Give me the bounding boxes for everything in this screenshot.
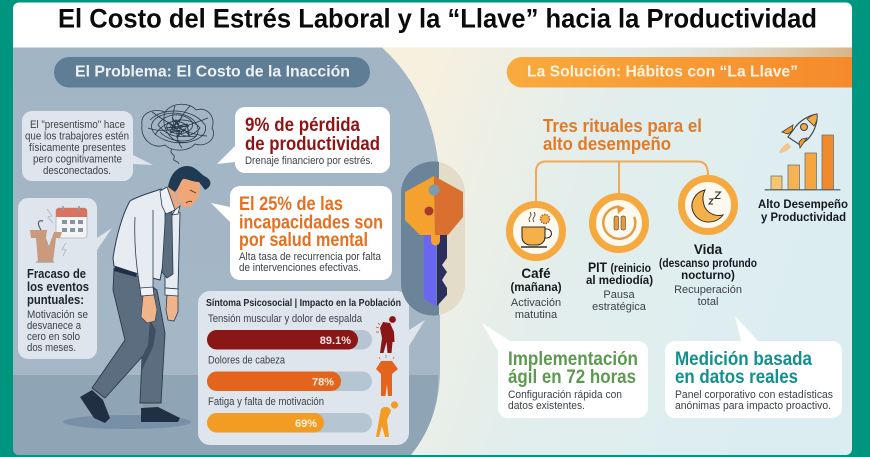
icon: tangled thought scribble (142, 104, 214, 164)
ritual: cafe: (mañana) (510, 282, 562, 294)
rituals heading: alto desempeño (543, 133, 671, 154)
key head left (405, 176, 435, 235)
ritual: vida: (descanso profundo (659, 258, 757, 270)
sleeve crease lines (135, 210, 153, 288)
bar: dolores de cabeza 78% (207, 354, 372, 391)
far hand (166, 295, 178, 321)
card: fracaso de los eventos puntuales: dos meses. (27, 342, 76, 354)
callout: 25% incapacidades: incapacidades son (239, 212, 383, 234)
icon: pause and restart (592, 196, 646, 250)
bar: tension muscular 89.1%: Tensión muscular y dolor de espalda (208, 313, 363, 325)
bar: tension muscular 89.1% (207, 313, 372, 350)
card: fracaso de los eventos puntuales: puntuales: (27, 292, 84, 307)
callout: 25% incapacidades: El 25% de las (239, 194, 343, 215)
icon: rocket (779, 114, 817, 153)
high performance chart: y Productividad (761, 210, 846, 224)
callout: 9% perdida de productividad: Drenaje financiero por estrés. (245, 155, 373, 167)
key gem (424, 206, 434, 216)
shoes (80, 390, 180, 423)
callout: 9% perdida de productividad (217, 107, 390, 173)
rituals heading: Tres rituales para el (543, 115, 702, 136)
far sleeve (165, 205, 180, 289)
ritual: cafe: Café (521, 266, 551, 281)
shadow (63, 415, 191, 429)
high performance chart: Alto Desempeño (758, 197, 848, 211)
callout: 25% incapacidades: Alta tasa de recurrencia por falta (239, 251, 382, 263)
bar: fatiga 69% (207, 396, 372, 432)
front hand (141, 295, 157, 323)
neck (163, 182, 180, 212)
ritual: vida: total (698, 296, 718, 308)
chart card: sintomas psicosociales (198, 291, 425, 445)
icon: yellow figure fatigue (376, 401, 398, 437)
tie (162, 211, 173, 278)
ritual: vida (659, 178, 757, 308)
callout: implementacion agil: Configuración rápida con (508, 389, 622, 401)
hair (168, 166, 210, 192)
card: fracaso de los eventos puntuales: desvanece a (27, 320, 82, 332)
trouser shade (141, 320, 156, 372)
icon: red figure back pain (376, 316, 396, 353)
key hole (428, 184, 440, 196)
high performance chart (758, 114, 848, 224)
card: fracaso de los eventos puntuales (18, 198, 112, 359)
bar: dolores de cabeza 78%: 78% (312, 376, 334, 388)
callout: implementacion agil: ágil en 72 horas (508, 367, 636, 388)
ritual: PIT (586, 196, 653, 313)
icon: moon and zzz (682, 178, 734, 232)
icon: key (401, 161, 465, 316)
rituals heading (543, 115, 702, 154)
callout: medicion basada en datos: Medición basada (675, 349, 812, 370)
front sleeve (133, 217, 153, 289)
heading pill: solution (507, 57, 852, 88)
panel: problem background (13, 48, 440, 456)
ritual: PIT: PIT (reinicio (588, 260, 651, 275)
callout: implementacion agil (482, 323, 648, 418)
key blade (424, 235, 436, 307)
ritual: PIT: estratégica (592, 301, 647, 313)
bar: tension muscular 89.1%: 89.1% (320, 335, 351, 347)
ritual: vida: nocturno) (681, 270, 735, 282)
cuffs (140, 287, 178, 296)
rising bars (765, 135, 840, 190)
card: fracaso de los eventos puntuales: los eventos (27, 279, 89, 294)
speech bubble: presentismo: que los trabajores estén (25, 130, 129, 142)
callout: 25% incapacidades: de intervenciones efectivas. (239, 262, 361, 274)
speech bubble: presentismo: pero cognitivamente (33, 154, 122, 166)
callout: 9% perdida de productividad: de productividad (245, 134, 380, 155)
panel: solution background (382, 48, 852, 455)
speech bubble: presentismo: desconectados. (43, 165, 111, 177)
belt (114, 266, 137, 277)
card: fracaso de los eventos puntuales: Fracaso de (27, 266, 86, 281)
key capsule background (401, 161, 439, 316)
bar: fatiga 69%: Fatiga y falta de motivación (208, 396, 324, 408)
callout: medicion basada en datos: Panel corporativo con estadísticas (675, 389, 833, 401)
collar (160, 187, 180, 215)
speech bubble: presentismo: físicamente presentes (29, 142, 126, 154)
ritual: vida: Recuperación (674, 284, 742, 296)
icon: orange figure headache (376, 355, 398, 396)
heading pill: solution: La Solución: Hábitos con “La Llave” (527, 64, 798, 80)
card: fracaso de los eventos puntuales: cero en solo (27, 331, 80, 343)
bar: dolores de cabeza 78%: Dolores de cabeza (208, 354, 286, 366)
icon: broken podium and calendar (30, 206, 87, 262)
callout: implementacion agil: Implementación (508, 349, 638, 370)
title: El Costo del Estrés Laboral y la “Llave” hacia la Productividad (58, 4, 817, 34)
man: stressed worker (63, 166, 210, 429)
speech bubble: presentismo: El "presentismo" hace (30, 119, 125, 131)
callout: 25% incapacidades (211, 186, 392, 280)
connector lines (536, 162, 708, 202)
key head right (434, 176, 463, 235)
socks (90, 388, 158, 409)
ritual: vida: Vida (694, 242, 723, 257)
chart card: sintomas psicosociales: Síntoma Psicosocial | Impacto en la Población (206, 297, 401, 309)
ritual: cafe: Activación (511, 297, 561, 309)
card: fracaso de los eventos puntuales: Motivación se (27, 309, 88, 321)
callout: implementacion agil: datos existentes. (508, 400, 585, 412)
ritual: PIT: Pausa (603, 289, 635, 301)
callout: medicion basada en datos: anónimas para impacto proactivo. (675, 400, 831, 412)
ritual: PIT: al mediodía) (586, 275, 653, 287)
callout: 25% incapacidades: por salud mental (239, 230, 368, 251)
shirt (113, 189, 172, 280)
face (176, 175, 200, 207)
ritual: cafe: matutina (515, 309, 558, 321)
ritual: cafe (510, 204, 562, 321)
callout: medicion basada en datos (665, 316, 842, 418)
heading pill: problem: El Problema: El Costo de la Inacción (75, 64, 350, 80)
speech bubble: presentismo (22, 111, 153, 181)
decorative top strip (665, 48, 852, 57)
heading pill: problem (54, 57, 370, 88)
trousers (92, 268, 165, 403)
icon: coffee cup (510, 204, 562, 258)
callout: 9% perdida de productividad: 9% de pérdida (245, 115, 360, 136)
key collar (431, 235, 440, 246)
bar: fatiga 69%: 69% (295, 418, 317, 430)
callout: medicion basada en datos: en datos reales (675, 367, 798, 388)
sad mouth and eye (186, 190, 196, 203)
